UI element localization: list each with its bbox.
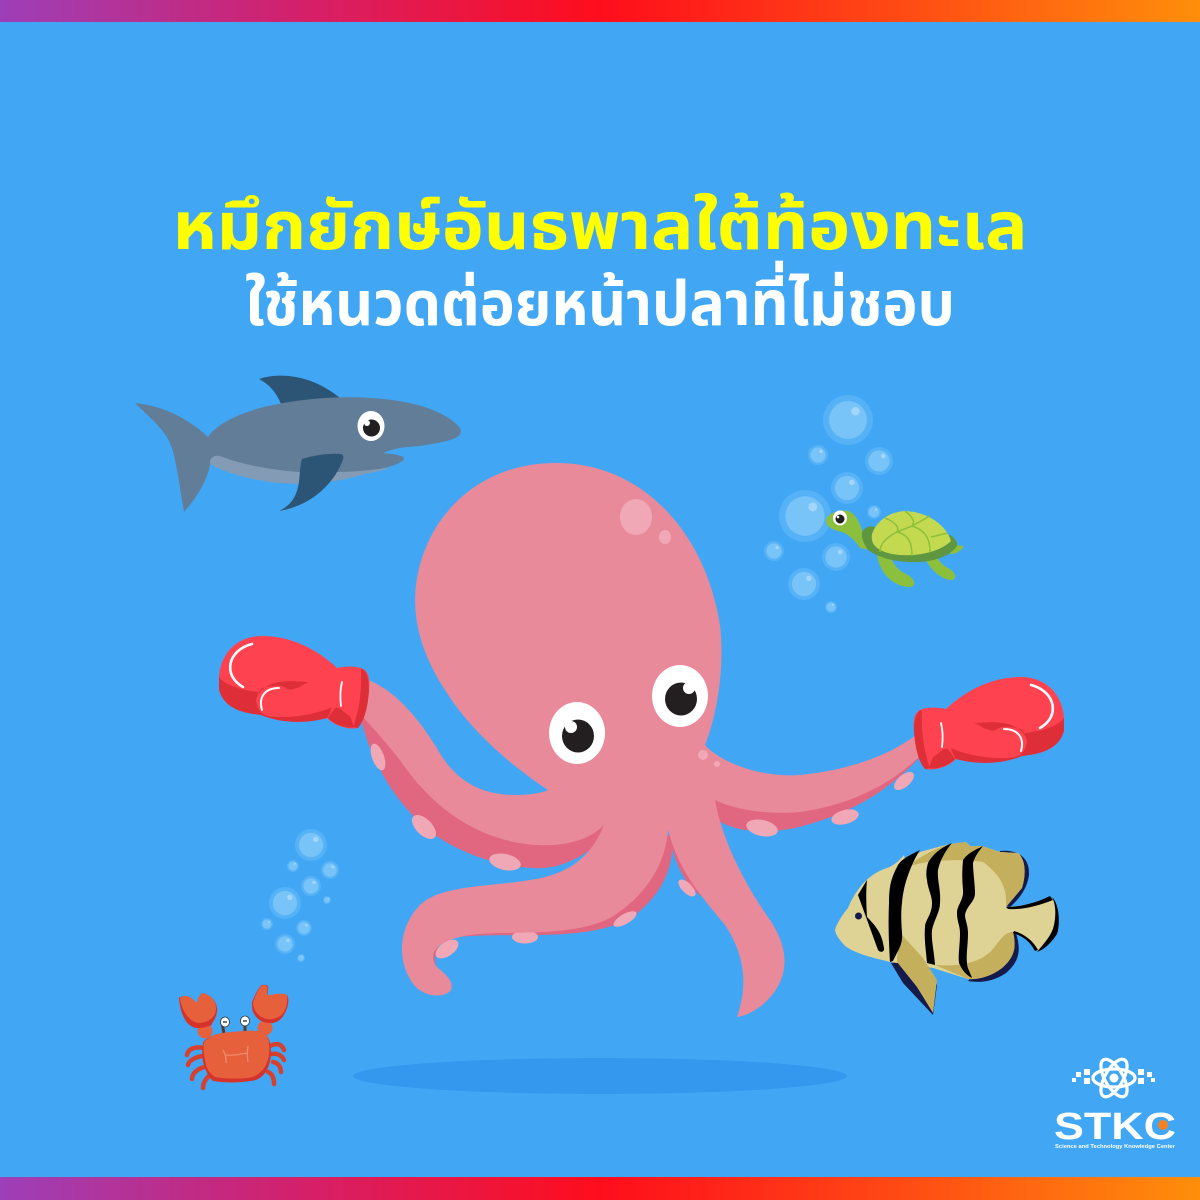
ground shadow — [353, 1058, 847, 1094]
octopus left arm underside — [360, 710, 612, 868]
octopus right arm underside — [705, 750, 922, 831]
top gradient bar — [0, 0, 1200, 22]
octopus — [360, 463, 922, 1017]
title: ใช้หนวดต่อยหน้าปลาที่ไม่ชอบ — [245, 260, 955, 339]
bubbles near turtle — [764, 395, 893, 613]
logo wordmark: STKC — [1054, 1106, 1176, 1148]
title — [172, 189, 1028, 339]
fish body — [835, 842, 1057, 979]
octopus head highlights — [620, 499, 652, 535]
fish dark outline — [891, 958, 937, 1015]
fish black tail edge — [1006, 896, 1059, 952]
icon: right boxing glove — [914, 677, 1064, 770]
octopus eyes — [549, 702, 605, 764]
icon: left boxing glove — [219, 636, 369, 729]
octopus lower arm shadows — [406, 835, 719, 990]
fish tan fins — [897, 935, 937, 1013]
icon: shark — [135, 376, 461, 512]
icon: crab — [179, 985, 288, 1088]
icon: angelfish — [835, 842, 1059, 1015]
bottom gradient bar — [0, 1177, 1200, 1200]
logo pixel squares — [1072, 1069, 1155, 1084]
bubbles near crab — [261, 829, 339, 962]
icon: turtle — [826, 510, 964, 587]
title: หมึกยักษ์อันธพาลใต้ท้องทะเล — [172, 189, 1028, 264]
octopus suckers — [368, 742, 917, 962]
octopus body and tentacles — [362, 463, 920, 1017]
logo: STKC — [1054, 1055, 1176, 1150]
logo atom icon — [1093, 1055, 1135, 1101]
fish black stripes — [858, 880, 884, 952]
fish eye — [855, 912, 862, 920]
logo dot — [1158, 1120, 1168, 1130]
logo tagline: Science and Technology Knowledge Center — [1055, 1144, 1176, 1150]
